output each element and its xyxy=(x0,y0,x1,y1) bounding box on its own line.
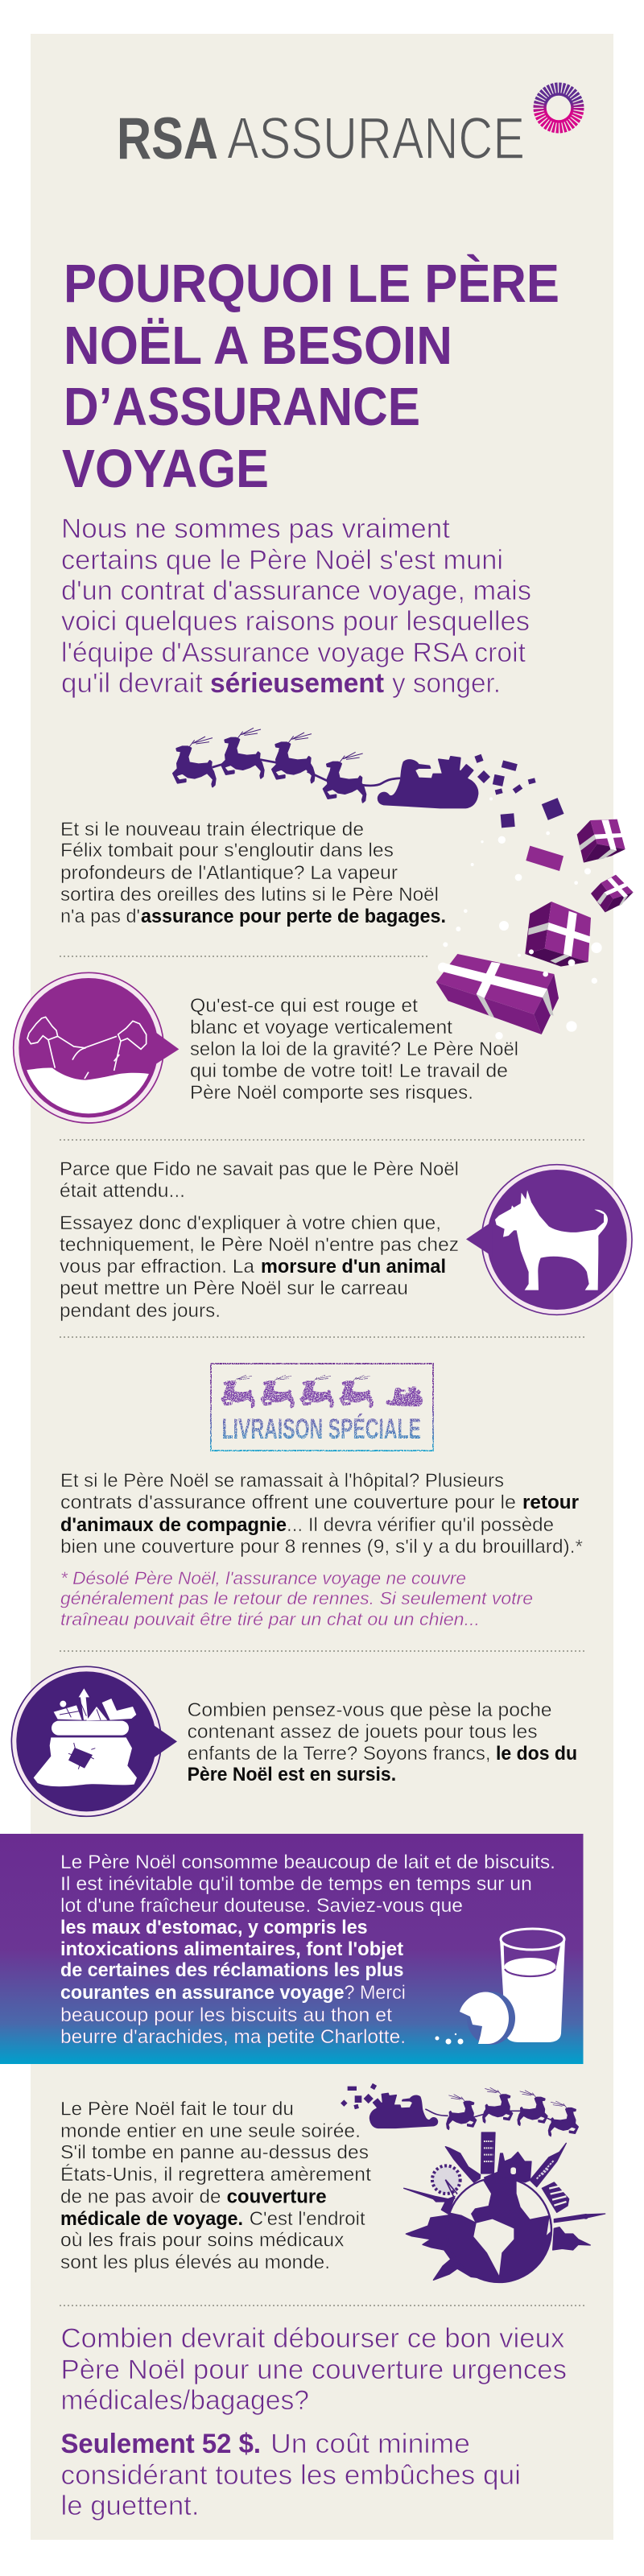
text: reindeer return xyxy=(60,1470,583,1558)
text: reindeer return: d'animaux de compagnie xyxy=(60,1514,287,1536)
text: medical coverage: C'est l'endroit xyxy=(250,2208,365,2230)
intro text: voici quelques raisons pour lesquelles xyxy=(61,606,530,637)
banner text: intoxications alimentaires, font l'objet xyxy=(60,1938,403,1960)
banner text: les maux d'estomac, y compris les xyxy=(60,1917,368,1938)
logo: RSA Assurance: ASSURANCE xyxy=(227,106,525,171)
intro text: d'un contrat d'assurance voyage, mais xyxy=(61,576,531,606)
gift C xyxy=(525,902,591,967)
text: falling from the roof: Qu'est-ce qui est rouge et xyxy=(190,995,418,1017)
logo: RSA Assurance: RSA xyxy=(117,106,218,171)
text: dog bite xyxy=(60,1158,459,1322)
intro text: certains que le Père Noël s'est muni xyxy=(61,545,503,576)
banner text: courantes en assurance voyage xyxy=(60,1982,345,2004)
text: lost luggage: sortira des oreilles des lutins si le Père Noël xyxy=(60,884,439,906)
closing question: médicales/bagages? xyxy=(61,2385,309,2416)
gift A xyxy=(577,819,625,863)
text: lost luggage: profondeurs de l'Atlantique? La vapeur xyxy=(60,862,398,884)
text: dog bite: techniquement, le Père Noël n'entre pas chez xyxy=(60,1234,459,1256)
text: Santa's back: Combien pensez-vous que pèse la poche xyxy=(188,1699,552,1721)
title xyxy=(62,254,559,499)
text: medical coverage: où les frais pour soins médicaux xyxy=(60,2230,345,2252)
text: medical coverage: sont les plus élevés au monde. xyxy=(60,2252,330,2273)
text: reindeer return: contrats d'assurance offrent une couverture pour le xyxy=(60,1492,516,1513)
text: medical coverage: S'il tombe en panne au-dessus des xyxy=(60,2141,369,2164)
intro text: Nous ne sommes pas vraiment xyxy=(61,514,451,544)
illustration: falling boxes and gifts xyxy=(436,754,634,1039)
text: lost luggage: Félix tombait pour s'engloutir dans les xyxy=(60,840,394,861)
text: falling from the roof: Père Noël comporte ses risques. xyxy=(190,1082,473,1104)
closing answer xyxy=(61,2429,521,2521)
text: dog bite: peut mettre un Père Noël sur le carreau xyxy=(60,1278,408,1299)
footnote: traîneau pouvait être tiré par un chat ou un chien... xyxy=(60,1609,480,1629)
text: lost luggage: n'a pas d' xyxy=(60,906,140,927)
banner text: de certaines des réclamations les plus xyxy=(60,1959,404,1981)
icon: Santa's legs in the snow xyxy=(14,972,179,1123)
intro text xyxy=(61,514,531,699)
text: dog bite: pendant des jours. xyxy=(60,1300,221,1322)
stamp: special delivery: LIVRAISON SPÉCIALE xyxy=(222,1413,421,1445)
text: medical coverage: médicale de voyage. xyxy=(60,2208,243,2230)
banner text: lot d'une fraîcheur douteuse. Saviez-vous que xyxy=(60,1895,463,1917)
closing question xyxy=(61,2323,567,2416)
title: NOËL A BESOIN xyxy=(64,316,452,376)
text: medical coverage: monde entier en une seule soirée. xyxy=(60,2120,361,2142)
footnote: généralement pas le retour de rennes. Si seulement votre xyxy=(60,1588,533,1608)
text: Santa's back: Père Noël est en sursis. xyxy=(188,1764,396,1785)
gift B xyxy=(591,875,634,912)
title: VOYAGE xyxy=(62,439,269,499)
text: falling from the roof: qui tombe de votre toit! Le travail de xyxy=(190,1060,508,1082)
text: reindeer return: bien une couverture pour 8 rennes (9, s'il y a du brouillard).* xyxy=(60,1536,583,1558)
title: D’ASSURANCE xyxy=(64,377,420,437)
closing answer: considérant toutes les embûches qui xyxy=(61,2460,521,2491)
intro text: sérieusement xyxy=(210,668,384,699)
logo: RSA Assurance xyxy=(117,89,578,171)
banner text: Il est inévitable qu'il tombe de temps en temps sur un xyxy=(60,1873,532,1895)
text: medical coverage: couverture xyxy=(227,2186,327,2208)
banner text: ? Merci xyxy=(345,1982,406,2004)
text: dog bite: Parce que Fido ne savait pas que le Père Noël xyxy=(60,1158,459,1180)
stamp: special delivery xyxy=(210,1363,434,1451)
text: reindeer return: retour xyxy=(522,1492,579,1513)
text: dog bite: Essayez donc d'expliquer à votre chien que, xyxy=(60,1212,441,1234)
text: Santa's back: contenant assez de jouets pour tous les xyxy=(188,1721,538,1743)
title: POURQUOI LE PÈRE xyxy=(64,254,559,314)
footnote: * Désolé Père Noël, l'assurance voyage ne couvre xyxy=(60,1568,466,1588)
illustration: Santa sleigh and reindeer xyxy=(173,728,477,807)
text: Santa's back: enfants de la Terre? Soyons francs, xyxy=(188,1743,491,1765)
icon: globe with landmarks xyxy=(404,2132,605,2282)
closing question: Père Noël pour une couverture urgences xyxy=(61,2355,567,2385)
text: reindeer return: ... Il devra vérifier qu'il possède xyxy=(287,1514,554,1536)
panel: milk and cookies banner xyxy=(0,1834,583,2064)
text: lost luggage: Et si le nouveau train électrique de xyxy=(60,819,364,840)
closing question: Combien devrait débourser ce bon vieux xyxy=(61,2323,565,2354)
icon: dog xyxy=(466,1165,632,1315)
intro text: l'équipe d'Assurance voyage RSA croit xyxy=(61,638,526,668)
text: dog bite: vous par effraction. La xyxy=(60,1256,255,1278)
illustration: sleigh over the globe xyxy=(341,2083,578,2136)
banner text: beurre d'arachides, ma petite Charlotte. xyxy=(60,2026,406,2048)
intro text: y songer. xyxy=(392,668,501,699)
text: medical coverage xyxy=(60,2098,371,2273)
icon: sack of toys xyxy=(11,1666,177,1816)
text: medical coverage: de ne pas avoir de xyxy=(60,2186,221,2208)
text: medical coverage: États-Unis, il regrettera amèrement xyxy=(60,2164,371,2186)
footnote xyxy=(60,1568,533,1629)
gift D xyxy=(436,954,559,1034)
text: falling from the roof: selon la loi de la gravité? Le Père Noël xyxy=(190,1038,518,1060)
text: lost luggage xyxy=(60,819,446,927)
text: medical coverage: Le Père Noël fait le tour du xyxy=(60,2098,294,2120)
text: Santa's back xyxy=(188,1699,577,1785)
banner text xyxy=(60,1852,555,2048)
banner text: Le Père Noël consomme beaucoup de lait et de biscuits. xyxy=(60,1852,555,1873)
text: falling from the roof xyxy=(190,995,518,1104)
text: Santa's back: le dos du xyxy=(496,1743,577,1765)
text: lost luggage: assurance pour perte de bagages. xyxy=(141,906,446,927)
icon: glass of milk and cookie xyxy=(435,1929,565,2045)
text: falling from the roof: blanc et voyage verticalement xyxy=(190,1017,452,1038)
text: reindeer return: Et si le Père Noël se ramassait à l'hôpital? Plusieurs xyxy=(60,1470,504,1492)
closing answer: Un coût minime xyxy=(270,2429,470,2459)
closing answer: le guettent. xyxy=(61,2491,199,2521)
text: dog bite: était attendu... xyxy=(60,1180,185,1202)
closing answer: Seulement 52 $. xyxy=(61,2429,261,2459)
banner text: beaucoup pour les biscuits au thon et xyxy=(60,2004,392,2026)
intro text: qu'il devrait xyxy=(61,668,204,699)
text: dog bite: morsure d'un animal xyxy=(261,1256,446,1278)
